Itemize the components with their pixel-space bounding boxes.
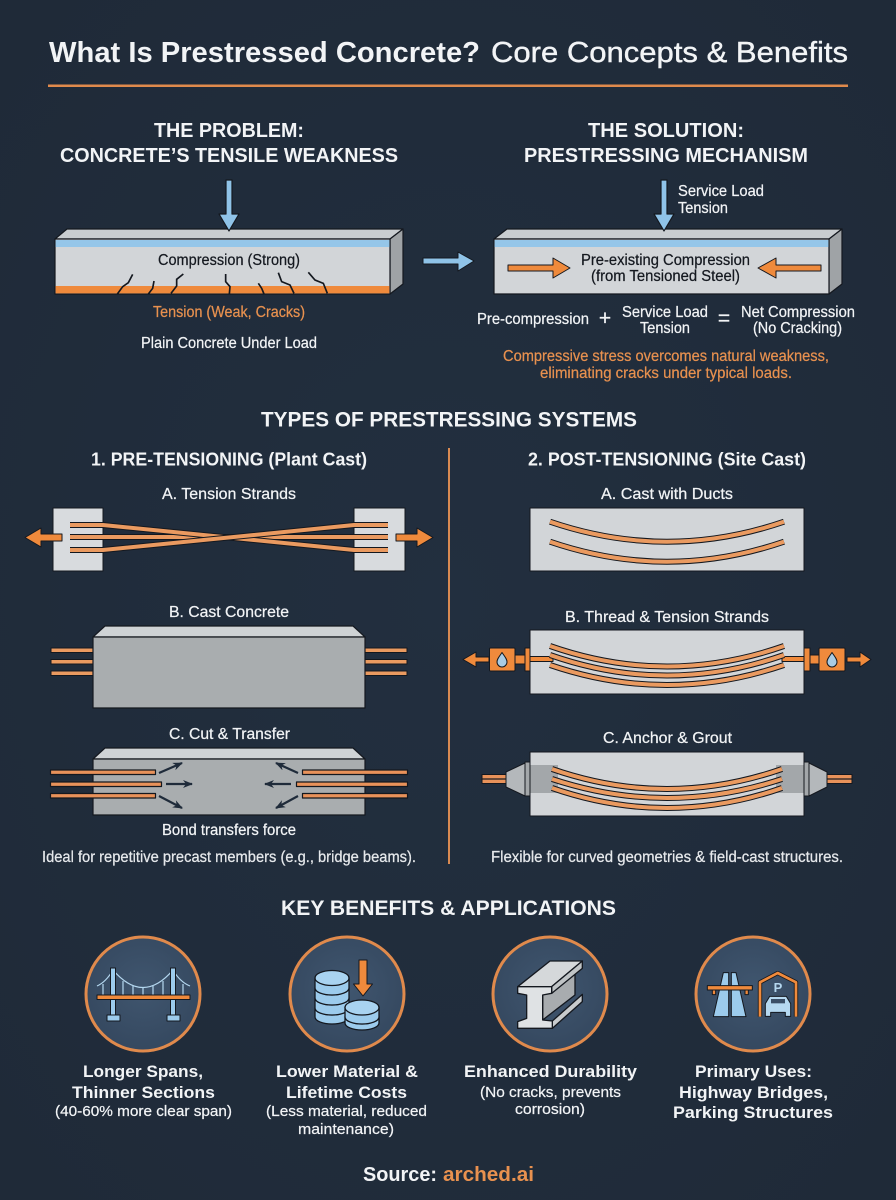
label: pre-existing compression: Pre-existing Compression [581,252,750,269]
text: primary uses [673,1062,833,1122]
title rule [48,84,848,87]
heading: the solution: THE SOLUTION: [588,119,744,142]
text: primary uses: Highway Bridges, [679,1083,828,1102]
text: lower costs: Lifetime Costs [286,1083,407,1102]
panel: the problem [55,119,403,352]
text: durability: corrosion) [515,1101,585,1118]
panel: pre-tensioning [25,448,433,866]
text: longer spans: Longer Spans, [83,1062,203,1081]
step label A: A. Tension Strands [162,486,296,503]
heading: key benefits: KEY BENEFITS & APPLICATIONS [281,897,616,920]
text: primary uses: Primary Uses: [695,1062,812,1081]
source [363,1164,534,1186]
icon: steel I-beam [493,937,607,1051]
equation [477,304,855,337]
equation: (No Cracking) [753,320,842,337]
label: pre-existing compression [581,252,750,285]
diagram: cast with ducts [530,508,804,571]
label: service load tension: Tension [678,200,728,217]
panel: benefit longer spans [55,937,232,1120]
text: durability: (No cracks, prevents [480,1084,621,1101]
panel: benefit durability [464,937,638,1118]
arrow: load down [219,180,239,231]
icon: highway and parking: P [774,980,783,995]
icon: suspension bridge [86,937,200,1051]
step label B: B. Cast Concrete [169,604,289,621]
equation: + [599,307,611,330]
text: durability [464,1062,638,1118]
text: lower costs: Lower Material & [276,1062,418,1081]
source: Source: [363,1164,437,1186]
text: lower costs: (Less material, reduced [266,1103,427,1120]
text: durability: Enhanced Durability [464,1062,638,1081]
heading: the problem: CONCRETE’S TENSILE WEAKNESS [60,144,398,167]
heading: post-tensioning: 2. POST-TENSIONING (Site Cast) [528,448,806,470]
equation: Tension [640,320,690,337]
equation: = [718,307,730,330]
text: lower costs: maintenance) [298,1121,394,1138]
step label C: C. Anchor & Grout [603,730,733,747]
label: bond transfers force: Bond transfers force [162,822,296,839]
title: Core Concepts & Benefits [491,37,848,69]
text: primary uses: Parking Structures [673,1103,833,1122]
diagram: anchor and grout [482,752,852,816]
diagram: cut and transfer [50,748,408,815]
heading: the solution: PRESTRESSING MECHANISM [524,144,808,167]
panel: benefit lower costs [266,937,427,1138]
heading: the solution [524,119,808,167]
panel: post-tensioning [463,448,871,866]
text: longer spans: (40-60% more clear span) [55,1103,232,1120]
equation: Pre-compression [477,311,589,328]
callout: compressive stress: Compressive stress overcomes natural weakness, [503,348,829,365]
icon: highway and parking [696,937,810,1051]
equation: Service Load [622,304,708,321]
diagram: cast concrete [51,626,407,708]
text: longer spans [55,1062,232,1120]
label: tension: Tension (Weak, Cracks) [153,304,305,321]
caption: plain concrete: Plain Concrete Under Load [141,335,317,352]
label: pre-existing compression: (from Tensioned Steel) [591,268,740,285]
icon: prestressed beam [494,229,842,294]
panel: benefit primary uses [673,937,833,1122]
title: What Is Prestressed Concrete? [49,37,480,69]
caption: post-tensioning use: Flexible for curved geometries & field-cast structures. [491,849,843,866]
heading: the problem: THE PROBLEM: [154,119,304,142]
heading: types of prestressing systems: TYPES OF PRESTRESSING SYSTEMS [261,408,637,432]
diagram: tension strands [25,508,433,571]
callout: compressive stress: eliminating cracks under typical loads. [540,365,792,382]
label: compression: Compression (Strong) [158,252,300,269]
caption: pre-tensioning use: Ideal for repetitive precast members (e.g., bridge beams). [42,849,416,866]
source: arched.ai [443,1164,534,1186]
label: service load tension [678,183,764,217]
text: longer spans: Thinner Sections [72,1083,215,1102]
text: lower costs [266,1062,427,1138]
arrow: service load [654,180,674,231]
step label B: B. Thread & Tension Strands [565,609,769,626]
step label A: A. Cast with Ducts [601,486,733,503]
callout: compressive stress [503,348,829,382]
heading: the problem [60,119,398,167]
diagram: thread and tension strands [463,630,871,694]
panel: the solution [477,119,855,382]
title [49,37,848,69]
step label C: C. Cut & Transfer [169,726,290,743]
equation: Net Compression [741,304,855,321]
arrow: problem to solution [423,252,474,271]
heading: pre-tensioning: 1. PRE-TENSIONING (Plant Cast) [91,448,367,470]
icon: coin stacks with down arrow [290,937,404,1051]
icon: cracked concrete beam [55,229,403,294]
label: service load tension: Service Load [678,183,764,200]
